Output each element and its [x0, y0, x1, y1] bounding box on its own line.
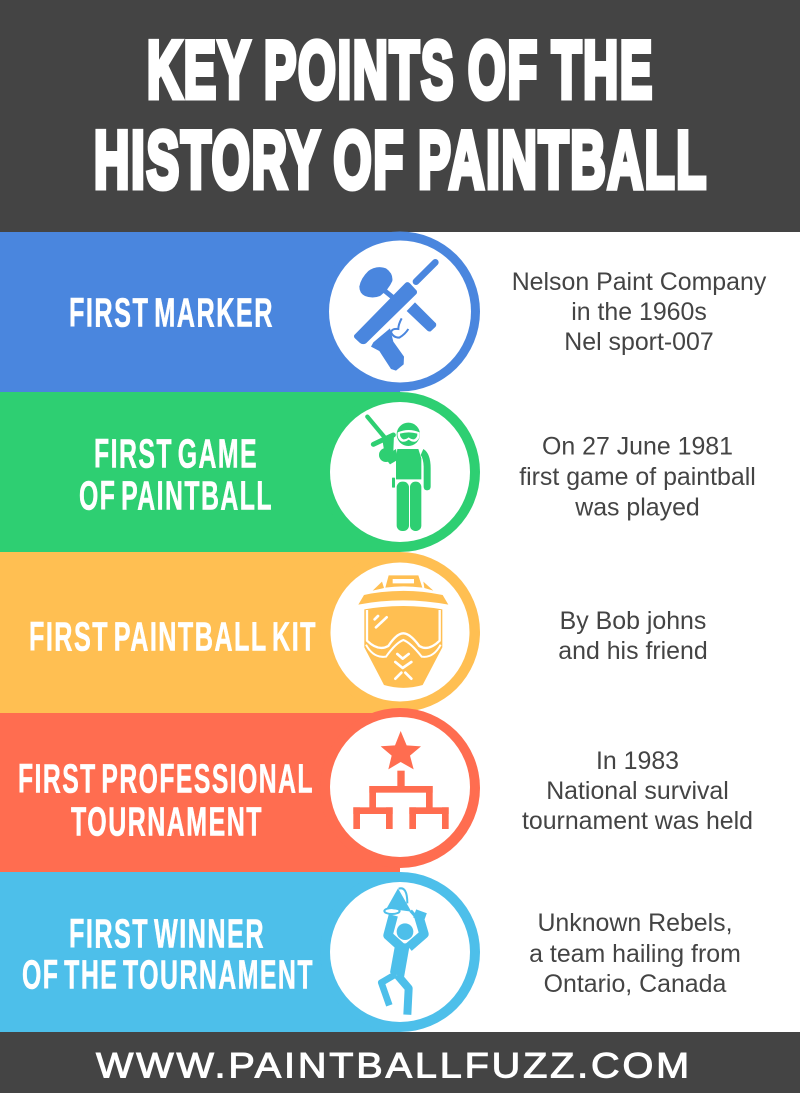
text block: first winner details: Unknown Rebels,: [537, 909, 733, 937]
text block: first kit details: and his friend: [558, 637, 708, 665]
heading: first winner of the tournament: [22, 910, 314, 998]
footer url: WWW.PAINTBALLFUZZ.COM: [96, 1046, 692, 1086]
heading: first professional tournament: [18, 756, 314, 844]
panel: first kit: [0, 552, 480, 713]
text block: first winner details: Ontario, Canada: [544, 970, 726, 998]
text block: first game details: first game of paintball: [519, 463, 756, 491]
text block: first tournament details: tournament was held: [522, 807, 753, 835]
panel: first game: [0, 392, 480, 552]
icon: paintball player: [320, 392, 480, 552]
heading: first game of paintball: OF PAINTBALL: [79, 472, 273, 518]
heading: first marker: FIRST MARKER: [69, 290, 274, 336]
icon: star tournament bracket: [320, 708, 480, 868]
title: [94, 26, 708, 206]
panel: first winner: [0, 872, 480, 1032]
text block: first game details: On 27 June 1981: [542, 432, 733, 460]
text block: first marker details: [512, 268, 767, 356]
text block: first kit details: [558, 607, 708, 665]
text block: first tournament details: National survival: [546, 777, 729, 805]
text block: first marker details: Nel sport-007: [564, 328, 714, 356]
heading: first paintball kit: FIRST PAINTBALL KIT: [29, 614, 317, 660]
heading: first game of paintball: [79, 430, 273, 518]
icon: person raising trophy: [320, 872, 480, 1032]
text block: first kit details: By Bob johns: [560, 607, 706, 635]
heading: first winner of the tournament: FIRST WINNER: [69, 910, 265, 956]
heading: first professional tournament: FIRST PROFESSIONAL: [18, 756, 314, 802]
heading: first professional tournament: TOURNAMENT: [71, 798, 263, 844]
icon: paintball marker: [320, 232, 480, 392]
text block: first marker details: in the 1960s: [571, 298, 707, 326]
text block: first winner details: a team hailing from: [529, 940, 741, 968]
panel: first marker: [0, 232, 480, 392]
text block: first tournament details: [522, 747, 753, 835]
header panel: [0, 0, 800, 232]
heading: first winner of the tournament: OF THE TOURNAMENT: [22, 952, 314, 998]
text block: first tournament details: In 1983: [596, 747, 679, 775]
panel: first tournament: [0, 708, 480, 872]
text block: first winner details: [529, 909, 741, 998]
text block: first marker details: Nelson Paint Company: [512, 268, 767, 296]
text block: first game details: [519, 432, 756, 522]
icon: paintball mask: [320, 552, 480, 712]
heading: first game of paintball: FIRST GAME: [94, 430, 258, 476]
footer panel: [0, 1032, 800, 1093]
text block: first game details: was played: [574, 494, 700, 522]
